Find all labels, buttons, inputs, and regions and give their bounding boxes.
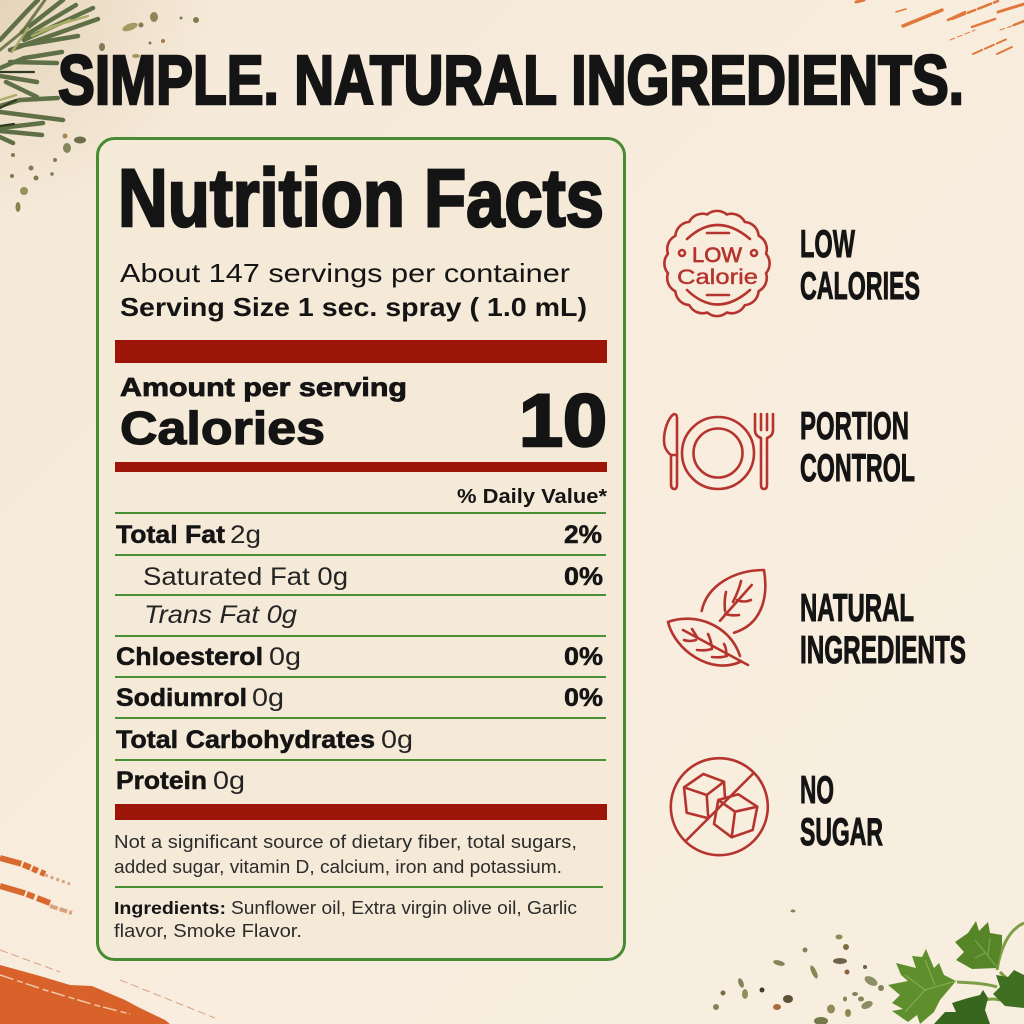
label: low calories: [800, 223, 920, 308]
nutrient table: [115, 512, 606, 795]
row: protein: 0g: [213, 767, 245, 795]
row: total fat: 2g: [230, 521, 261, 549]
label: portion control: [800, 405, 915, 490]
serving information: [120, 258, 587, 322]
nutrition facts panel: [98, 138, 624, 960]
row: sodium: 0%: [564, 684, 603, 712]
red divider bottom: [115, 804, 607, 820]
row: total carbohydrates: 0g: [381, 726, 413, 754]
footnote: [114, 832, 577, 877]
label: natural ingredients: NATURAL: [800, 587, 914, 630]
row: total fat: [116, 521, 602, 549]
row: cholesterol: 0%: [564, 643, 603, 671]
ingredients list: Ingredients:: [114, 898, 226, 918]
ingredients list: flavor, Smoke Flavor.: [114, 921, 302, 941]
row: saturated fat: Saturated Fat 0g: [143, 563, 348, 591]
serving information: About 147 servings per container: [120, 258, 570, 288]
icon: low calorie badge: [656, 202, 778, 325]
icon: leaves: [668, 570, 765, 666]
rosemary sprig: [0, 0, 98, 143]
scattered herb seeds bottom right: [713, 910, 884, 1024]
panel background: [98, 138, 624, 960]
row: cholesterol: 0g: [269, 643, 301, 671]
label: low calories: CALORIES: [800, 265, 920, 308]
row: sodium: 0g: [252, 684, 284, 712]
row: protein: Protein: [116, 767, 207, 795]
label: no sugar: SUGAR: [800, 811, 883, 854]
row: saturated fat: 0%: [564, 563, 603, 591]
daily value heading: % Daily Value*: [457, 486, 607, 508]
row: total carbohydrates: Total Carbohydrates: [116, 726, 375, 754]
scattered herb flakes top left: [10, 12, 199, 212]
label: portion control: CONTROL: [800, 447, 915, 490]
icon: low calorie badge: LOW: [692, 244, 742, 267]
serving information: Serving Size 1 sec. spray ( 1.0 mL): [120, 292, 587, 322]
thick red divider: [115, 340, 607, 363]
footnote: Not a significant source of dietary fiber, total sugars,: [114, 832, 577, 852]
row: trans fat: Trans Fat 0g: [144, 601, 297, 629]
row: sodium: Sodiumrol: [116, 684, 247, 712]
panel heading: Nutrition Facts: [118, 153, 604, 244]
row: cholesterol: Chloesterol: [116, 643, 263, 671]
ingredients list: [114, 898, 577, 941]
parsley sprig: [888, 921, 1024, 1024]
icon: no sugar: [671, 758, 768, 855]
orange brush strokes bottom left: [0, 858, 215, 1024]
row: saturated fat: [143, 563, 603, 591]
footnote: added sugar, vitamin D, calcium, iron and potassium.: [114, 857, 562, 877]
icon: low calorie badge: Calorie: [677, 266, 758, 289]
row: total fat: Total Fat: [116, 521, 226, 549]
amount per serving and calories: Calories: [120, 402, 325, 454]
label: no sugar: NO: [800, 769, 834, 812]
row: total fat: 2%: [564, 521, 602, 549]
ingredients list: Sunflower oil, Extra virgin olive oil, Garlic: [231, 898, 577, 918]
label: portion control: PORTION: [800, 405, 909, 448]
row: protein: [116, 767, 245, 795]
label: no sugar: [800, 769, 883, 854]
orange brush strokes top right: [856, 0, 1024, 54]
icon: plate with knife and fork: [664, 414, 773, 489]
label: low calories: LOW: [800, 223, 855, 266]
amount per serving and calories: Amount per serving: [120, 372, 407, 402]
row: sodium: [116, 684, 603, 712]
amount per serving and calories: 10: [519, 379, 607, 462]
amount per serving and calories: [120, 372, 607, 462]
red divider: [115, 462, 607, 472]
row: cholesterol: [116, 643, 603, 671]
label: natural ingredients: [800, 587, 966, 672]
